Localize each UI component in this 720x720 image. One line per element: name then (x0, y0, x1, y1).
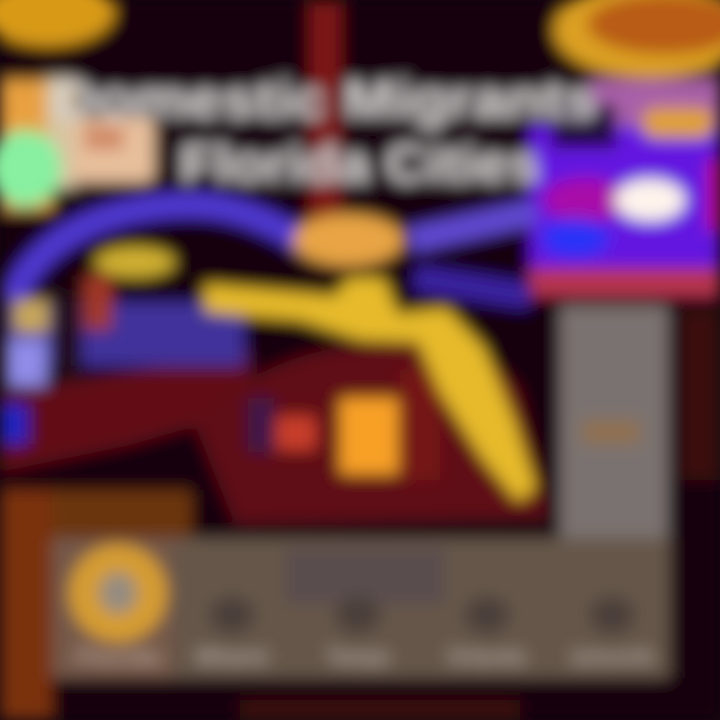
panel: right column (560, 306, 668, 586)
donut chart (84, 559, 152, 627)
icon: yellow ellipse (95, 247, 175, 277)
title: Florida Cities (180, 134, 540, 194)
chart label (582, 420, 640, 444)
stat 3: Orlando (448, 644, 526, 669)
icon: green globe (0, 130, 61, 206)
title: Domestic Migrants (52, 70, 598, 130)
stat 4: Jacksonville (570, 644, 654, 669)
icon: orange sun (293, 214, 403, 266)
map: dark red base (195, 343, 548, 524)
map: Florida (205, 278, 536, 502)
red vertical stripe (309, 0, 341, 240)
stat 4 (570, 596, 654, 669)
panel: bottom stats (52, 538, 670, 678)
panel: right purple illustration (530, 80, 720, 296)
stat 1 (196, 596, 268, 669)
panel: left skyline (0, 247, 250, 472)
panel: left illustration strip (0, 78, 154, 210)
icon: purple arc (12, 205, 535, 300)
title (52, 70, 598, 194)
stat 3 (448, 596, 526, 669)
icon: orange building (276, 398, 398, 474)
icon: left burger (0, 0, 114, 46)
stat 2: Tampa (327, 644, 390, 669)
donut label: Florida (76, 644, 161, 669)
icon: white badge (615, 179, 685, 221)
icon: right burger (554, 0, 720, 78)
icon: peach block (74, 118, 154, 182)
stat 2 (327, 596, 390, 669)
icon: gold label (642, 108, 714, 138)
stat 1: Miami (196, 644, 268, 669)
